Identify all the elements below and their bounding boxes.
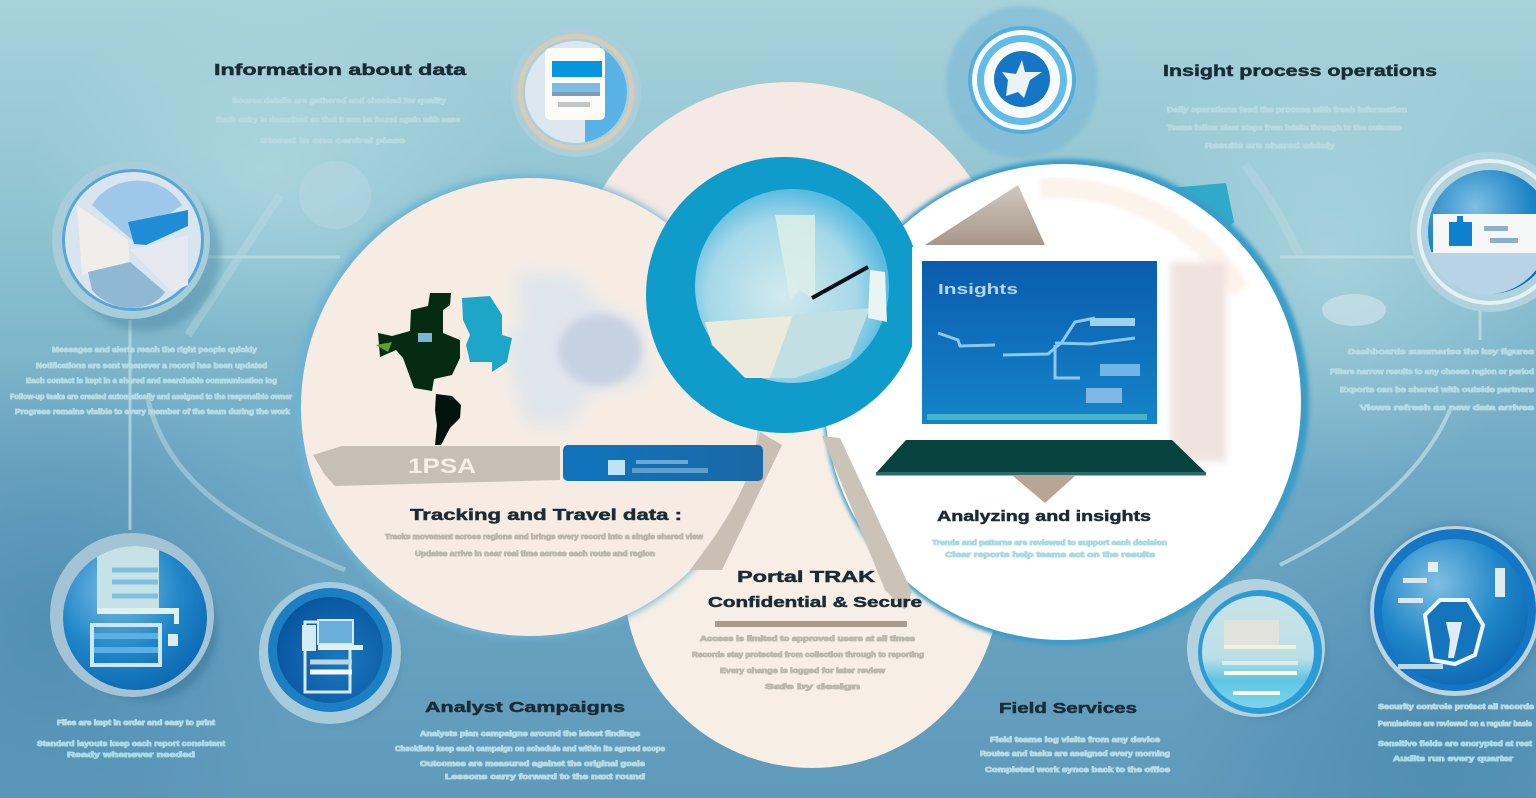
laptop: Insights <box>938 281 1018 298</box>
text block: left: Notifications are sent whenever a record has been updated <box>36 363 267 370</box>
text block: top right: Teams follow clear steps from intake through to the outcome <box>1167 125 1402 132</box>
text block: bottom centre-left: Lessons carry forward to the next round <box>445 774 645 781</box>
icon: map <box>376 272 648 445</box>
wedge: taupe top <box>925 185 1045 245</box>
text block: bottom left: Files are kept in order and easy to print <box>57 720 216 727</box>
icon: browser card right <box>1410 152 1536 312</box>
text block: bottom right: Security controls protect all records <box>1378 704 1534 711</box>
heading: bottom circle: Safe by design <box>765 684 860 691</box>
text block: bottom centre-left: Analyst Campaigns <box>425 699 625 716</box>
heading: bottom circle: Every change is logged for later review <box>720 668 886 675</box>
text block: right: Filters narrow results to any chosen region or period <box>1330 369 1534 376</box>
text block: left: Progress remains visible to every member of the team during the work <box>15 409 290 416</box>
heading: bottom circle <box>692 569 924 691</box>
panel: bottom cream circle <box>624 392 1000 768</box>
heading: bottom circle: Records stay protected from collection through to reporting <box>692 652 924 659</box>
banner: blue pill <box>563 445 763 481</box>
text block: top right: Daily operations feed the process with fresh information <box>1167 107 1407 114</box>
icon: clipboard bottom <box>259 582 401 724</box>
text block: bottom centre-left: Checklists keep each campaign on schedule and within its agreed scope <box>395 746 665 753</box>
text block: bottom left: Ready whenever needed <box>67 752 195 759</box>
heading: right circle: Clear reports help teams act on the results <box>945 552 1155 559</box>
text block: bottom left: Standard layouts keep each report consistent <box>37 741 226 748</box>
heading: right circle <box>932 508 1167 559</box>
heading: left circle: Tracks movement across regions and brings every record into a single shared view <box>385 534 704 541</box>
heading: left circle <box>385 507 704 558</box>
text block: left: Follow-up tasks are created automatically and assigned to the responsible owner <box>10 394 292 401</box>
panel: right circle with laptop <box>823 159 1309 645</box>
banner: taupe ribbon: 1PSA <box>408 455 476 478</box>
text block: bottom right: Audits run every quarter <box>1393 756 1513 763</box>
text block: top left: Each entry is described so that it can be found again with ease <box>216 117 460 124</box>
text block: bottom right: Sensitive fields are encrypted at rest <box>1378 741 1533 748</box>
text block: left: Messages and alerts reach the right people quickly <box>52 347 257 354</box>
heading: left circle: Updates arrive in near real time across each route and region <box>415 551 655 558</box>
ring: central dial <box>646 157 922 433</box>
text block: bottom left <box>37 720 226 759</box>
text block: bottom centre-left: Outcomes are measured against the original goals <box>420 761 645 768</box>
icon: star badge <box>946 6 1098 158</box>
text block: top left: Stored in one central place <box>260 138 405 145</box>
text block: right <box>1330 349 1534 412</box>
text block: bottom centre-right <box>980 700 1170 774</box>
panel: left circle with map <box>295 175 759 639</box>
icon: envelope <box>52 161 221 331</box>
laptop <box>876 247 1206 503</box>
network connector lines <box>130 161 1480 570</box>
icon: pale document bottom right <box>1187 579 1325 717</box>
text block: right: Views refresh as new data arrives <box>1360 405 1534 412</box>
icon: document top <box>511 27 641 157</box>
text block: bottom centre-right: Field Services <box>999 700 1137 717</box>
heading: bottom circle: Confidential & Secure <box>708 594 922 611</box>
text block: bottom centre-left: Analysts plan campaigns around the latest findings <box>420 731 640 738</box>
panel: top cream circle <box>572 82 1008 518</box>
text block: top left: Information about data <box>214 62 466 79</box>
text block: left <box>10 347 292 416</box>
text block: top left: Source details are gathered and checked for quality <box>232 98 446 105</box>
heading: bottom circle: Portal TRAK <box>737 569 876 586</box>
text block: bottom centre-right: Completed work syncs back to the office <box>985 767 1170 774</box>
text block: top right: Results are shared widely <box>1205 143 1335 150</box>
text block: bottom right: Permissions are reviewed on a regular basis <box>1378 721 1532 728</box>
text block: top right: Insight process operations <box>1163 63 1437 80</box>
wedge: taupe band right of the left circle <box>690 432 782 570</box>
icon: security keyhole bottom right <box>1368 523 1536 699</box>
text block: top right <box>1163 63 1437 150</box>
wedge: taupe band lower centre <box>822 436 912 610</box>
banner: taupe ribbon <box>313 446 560 486</box>
text block: bottom centre-left <box>395 699 665 781</box>
text block: bottom right <box>1378 704 1534 763</box>
text block: top left <box>214 62 466 145</box>
icon: printer bottom left <box>50 533 217 700</box>
heading: left circle: Tracking and Travel data : <box>410 507 682 524</box>
text block: bottom centre-right: Routes and tasks are assigned every morning <box>980 751 1170 758</box>
text block: right: Dashboards summarise the key figures <box>1348 349 1534 356</box>
text block: right: Exports can be shared with outside partners <box>1340 387 1534 394</box>
heading: right circle: Analyzing and insights <box>937 508 1151 525</box>
heading: bottom circle: Access is limited to approved users at all times <box>700 636 915 643</box>
heading: right circle: Trends and patterns are reviewed to support each decision <box>932 540 1167 547</box>
text block: bottom centre-right: Field teams log visits from any device <box>990 737 1160 744</box>
text block: left: Each contact is kept in a shared and searchable communication log <box>26 378 277 385</box>
